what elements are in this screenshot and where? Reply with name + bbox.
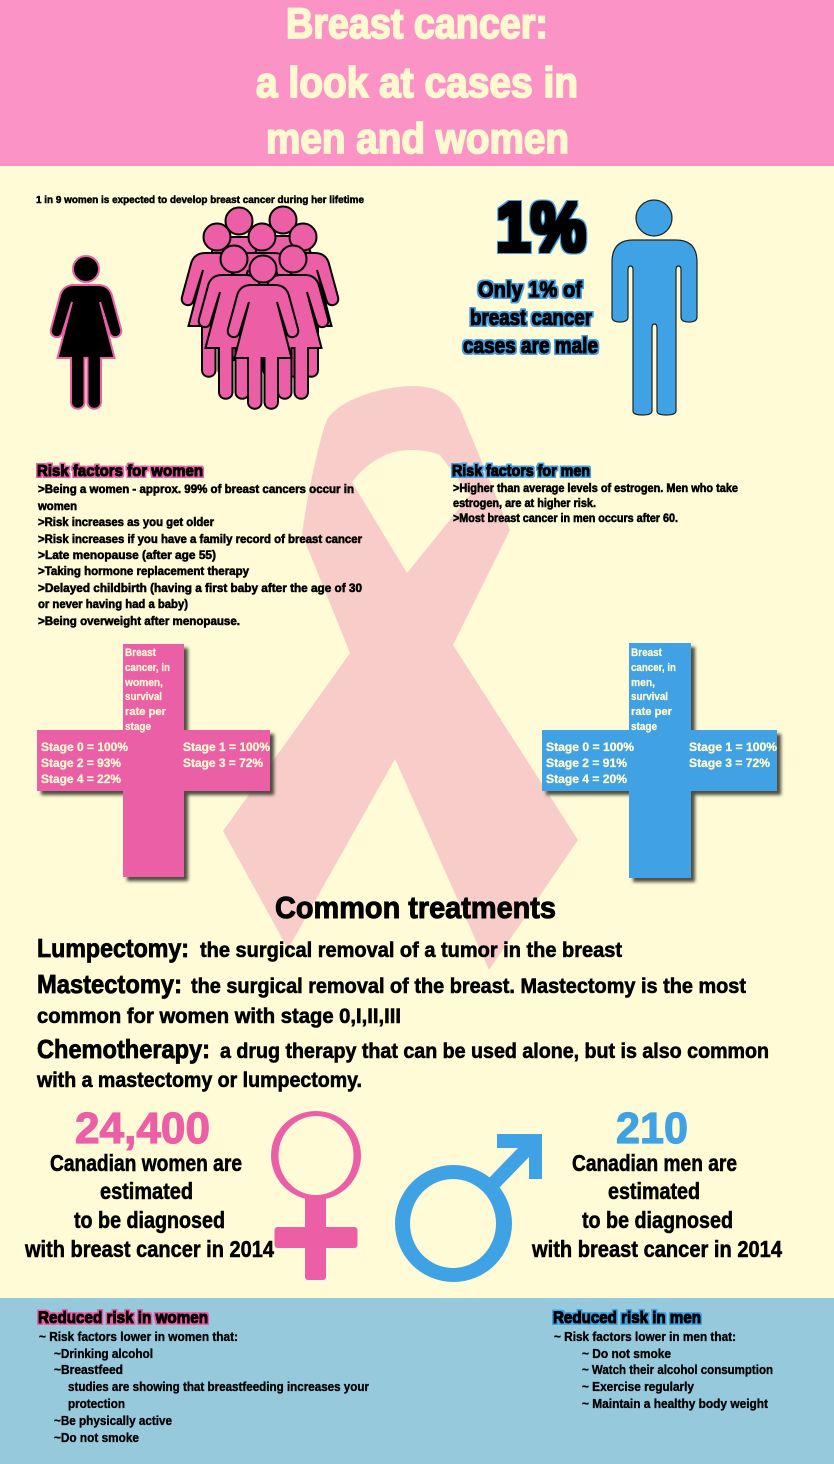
reduced risk in women: studies are showing that breastfeeding increases your bbox=[68, 1379, 369, 1394]
cross heading: rate per bbox=[631, 706, 673, 718]
stat caption: cases are male bbox=[463, 333, 598, 358]
stat description: with breast cancer in 2014 bbox=[24, 1236, 274, 1262]
reduced risk in women: ~ Risk factors lower in women that: bbox=[39, 1329, 238, 1344]
panel: risk factors for men bbox=[452, 463, 738, 525]
stage rates: Stage 3 = 72% bbox=[183, 758, 263, 770]
lumpectomy: the surgical removal of a tumor in the breast bbox=[200, 939, 622, 962]
cross heading bbox=[631, 647, 676, 733]
cross heading: survival bbox=[125, 691, 162, 703]
panel: survival rate men cross bbox=[542, 643, 777, 878]
list: >Risk increases if you have a family record of breast cancer bbox=[38, 534, 363, 546]
list: women bbox=[37, 501, 77, 513]
stat: 1 in 9 women: 1 in 9 women is expected to develop breast cancer during her lifetime bbox=[36, 194, 364, 206]
cross heading bbox=[124, 647, 170, 733]
icon: single woman bbox=[51, 256, 121, 409]
reduced risk in men: ~ Maintain a healthy body weight bbox=[582, 1396, 769, 1411]
reduced risk in women bbox=[38, 1308, 369, 1445]
stat description: Canadian women are bbox=[50, 1150, 242, 1176]
reduced risk in women: ~Do not smoke bbox=[54, 1430, 139, 1445]
list: >Higher than average levels of estrogen. Men who take bbox=[453, 483, 738, 495]
reduced risk in women: ~Breastfeed bbox=[54, 1362, 123, 1377]
stat caption: Only 1% of bbox=[478, 277, 583, 302]
mastectomy: the surgical removal of the breast. Mastectomy is the most bbox=[191, 975, 746, 998]
reduced risk in men bbox=[553, 1308, 773, 1411]
stat description: Canadian men are bbox=[572, 1150, 737, 1176]
reduced risk in women: Reduced risk in women bbox=[38, 1308, 208, 1327]
stat description: estimated bbox=[100, 1178, 193, 1204]
cross heading: Breast bbox=[631, 647, 662, 659]
stat description: to be diagnosed bbox=[74, 1207, 225, 1233]
chemotherapy: Chemotherapy: bbox=[37, 1034, 210, 1064]
stat description bbox=[24, 1150, 274, 1262]
mastectomy: Mastectomy: bbox=[37, 969, 182, 999]
stat: Canadian men bbox=[531, 1104, 782, 1262]
list: estrogen, are at higher risk. bbox=[453, 498, 596, 510]
reduced risk in men: ~ Risk factors lower in men that: bbox=[554, 1329, 736, 1344]
reduced risk in men: ~ Watch their alcohol consumption bbox=[582, 1362, 773, 1377]
stat: 1 percent: 1% bbox=[496, 188, 586, 266]
cross heading: Breast bbox=[125, 647, 156, 659]
title: a look at cases in bbox=[256, 59, 578, 107]
stat: 1 percent bbox=[463, 188, 598, 358]
list: >Late menopause (after age 55) bbox=[38, 550, 216, 562]
cross heading: women, bbox=[124, 677, 163, 689]
stat: Canadian women bbox=[24, 1104, 274, 1262]
cross heading: cancer, in bbox=[125, 662, 170, 674]
list: >Taking hormone replacement therapy bbox=[38, 566, 250, 578]
stat caption: breast cancer bbox=[470, 305, 592, 330]
list: >Delayed childbirth (having a first baby after the age of 30 bbox=[38, 583, 362, 595]
cross heading: stage bbox=[125, 721, 151, 733]
icon: group of eight women bbox=[182, 206, 338, 409]
title: men and women bbox=[266, 115, 569, 163]
reduced risk in women: ~Be physically active bbox=[54, 1413, 172, 1428]
stat: Canadian women: 24,400 bbox=[75, 1104, 210, 1153]
list: >Risk increases as you get older bbox=[38, 517, 215, 529]
stage rates: Stage 2 = 93% bbox=[41, 758, 121, 770]
panel: common treatments bbox=[36, 890, 769, 1092]
chemotherapy bbox=[36, 1034, 769, 1092]
title: Breast cancer: bbox=[286, 0, 548, 48]
icon: male symbol bbox=[395, 1134, 542, 1282]
list bbox=[37, 484, 363, 628]
chemotherapy: with a mastectomy or lumpectomy. bbox=[36, 1069, 362, 1092]
stage rates: Stage 1 = 100% bbox=[183, 742, 270, 754]
icon: man bbox=[612, 200, 697, 415]
heading: Risk factors for women bbox=[37, 463, 203, 480]
panel: reduced risk footer bbox=[0, 1298, 834, 1464]
reduced risk in men: ~ Do not smoke bbox=[582, 1346, 671, 1361]
stage rates bbox=[41, 742, 270, 786]
panel: survival rate women cross bbox=[37, 644, 270, 877]
icon: female symbol bbox=[271, 1111, 361, 1280]
stage rates: Stage 4 = 20% bbox=[546, 774, 627, 786]
list: >Most breast cancer in men occurs after 60. bbox=[453, 513, 678, 525]
stage rates: Stage 0 = 100% bbox=[41, 742, 128, 754]
stat description bbox=[531, 1150, 782, 1262]
mastectomy: common for women with stage 0,I,II,III bbox=[37, 1005, 401, 1028]
chemotherapy: a drug therapy that can be used alone, but is also common bbox=[220, 1040, 769, 1063]
list: >Being a women - approx. 99% of breast cancers occur in bbox=[38, 484, 354, 496]
heading: Risk factors for men bbox=[452, 463, 590, 480]
cross heading: survival bbox=[631, 691, 668, 703]
list: or never having had a baby) bbox=[38, 599, 188, 611]
stage rates: Stage 2 = 91% bbox=[546, 758, 627, 770]
mastectomy bbox=[37, 969, 746, 1028]
stage rates: Stage 4 = 22% bbox=[41, 774, 121, 786]
cross heading: cancer, in bbox=[631, 662, 676, 674]
stat: Canadian men: 210 bbox=[616, 1104, 688, 1153]
stage rates: Stage 1 = 100% bbox=[689, 742, 777, 754]
stat description: to be diagnosed bbox=[582, 1207, 733, 1233]
cross heading: stage bbox=[631, 721, 657, 733]
cross heading: men, bbox=[631, 677, 655, 689]
panel: risk factors for women bbox=[37, 463, 363, 628]
reduced risk in men: Reduced risk in men bbox=[553, 1308, 701, 1327]
list: >Being overweight after menopause. bbox=[38, 616, 240, 628]
stat description: estimated bbox=[608, 1178, 700, 1204]
heading: Common treatments bbox=[275, 890, 556, 925]
lumpectomy bbox=[37, 933, 622, 963]
list bbox=[453, 483, 738, 525]
reduced risk in men: ~ Exercise regularly bbox=[582, 1379, 695, 1394]
reduced risk in women: ~Drinking alcohol bbox=[54, 1346, 153, 1361]
stage rates bbox=[546, 742, 777, 786]
cross heading: rate per bbox=[125, 706, 167, 718]
stage rates: Stage 0 = 100% bbox=[546, 742, 634, 754]
stage rates: Stage 3 = 72% bbox=[689, 758, 770, 770]
title bbox=[256, 0, 578, 163]
background ribbon bbox=[223, 386, 578, 970]
lumpectomy: Lumpectomy: bbox=[37, 933, 189, 963]
header banner bbox=[0, 0, 834, 166]
stat caption bbox=[463, 277, 598, 358]
reduced risk in women: protection bbox=[68, 1396, 125, 1411]
stat description: with breast cancer in 2014 bbox=[531, 1236, 782, 1262]
